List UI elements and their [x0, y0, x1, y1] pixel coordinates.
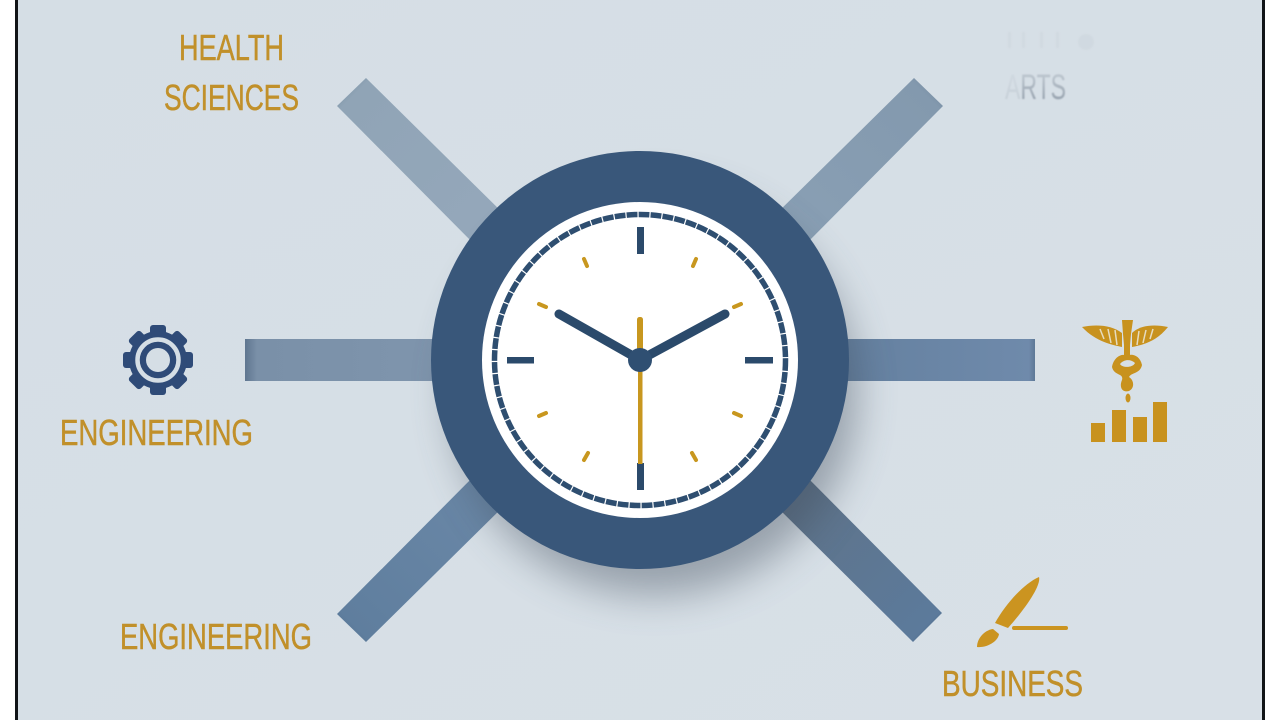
snake tail	[1126, 394, 1130, 402]
light ring	[138, 340, 178, 380]
left border	[15, 0, 18, 720]
ray: bottom right	[770, 470, 942, 642]
arts word: ARTS	[1005, 68, 1066, 107]
left wing	[1082, 325, 1122, 347]
snake coil	[1112, 355, 1142, 391]
right hand	[640, 314, 725, 360]
icon: caduceus	[1082, 320, 1168, 442]
staff head	[1122, 320, 1133, 345]
health word: HEALTH	[179, 27, 284, 68]
faded label: arts	[1005, 32, 1094, 107]
right border	[1262, 0, 1265, 720]
bar chart	[1091, 402, 1167, 442]
minute track	[494, 214, 786, 506]
sciences word: SCIENCES	[164, 77, 299, 118]
outer ring	[431, 151, 849, 569]
clock	[431, 151, 849, 569]
gold second hand	[637, 317, 643, 464]
gold minor ticks	[539, 259, 741, 460]
hour ticks	[507, 227, 773, 490]
brush handle	[995, 577, 1039, 628]
left hand	[559, 314, 640, 360]
label: health sciences	[164, 27, 299, 118]
ray: bottom left	[337, 470, 510, 642]
dial shadow	[451, 189, 857, 595]
gear body	[129, 331, 187, 389]
ray: top right	[770, 78, 943, 250]
brush head	[977, 629, 999, 647]
right wing	[1132, 325, 1168, 347]
label: business: BUSINESS	[942, 663, 1083, 704]
clock face	[482, 202, 798, 518]
brush line	[1012, 626, 1068, 630]
center hole	[146, 348, 170, 372]
wing feathers	[1100, 329, 1153, 345]
ray: top left	[337, 78, 510, 250]
faded upper mark	[1008, 32, 1094, 50]
label: engineering left: ENGINEERING	[60, 412, 253, 453]
label: engineering bottom: ENGINEERING	[120, 616, 312, 657]
icon: paintbrush	[977, 577, 1068, 647]
ray: right	[835, 339, 1035, 381]
staff	[1124, 340, 1130, 358]
ray: left	[245, 339, 445, 381]
gear teeth	[123, 325, 193, 395]
center hub	[628, 348, 652, 372]
icon: gear	[123, 325, 193, 395]
